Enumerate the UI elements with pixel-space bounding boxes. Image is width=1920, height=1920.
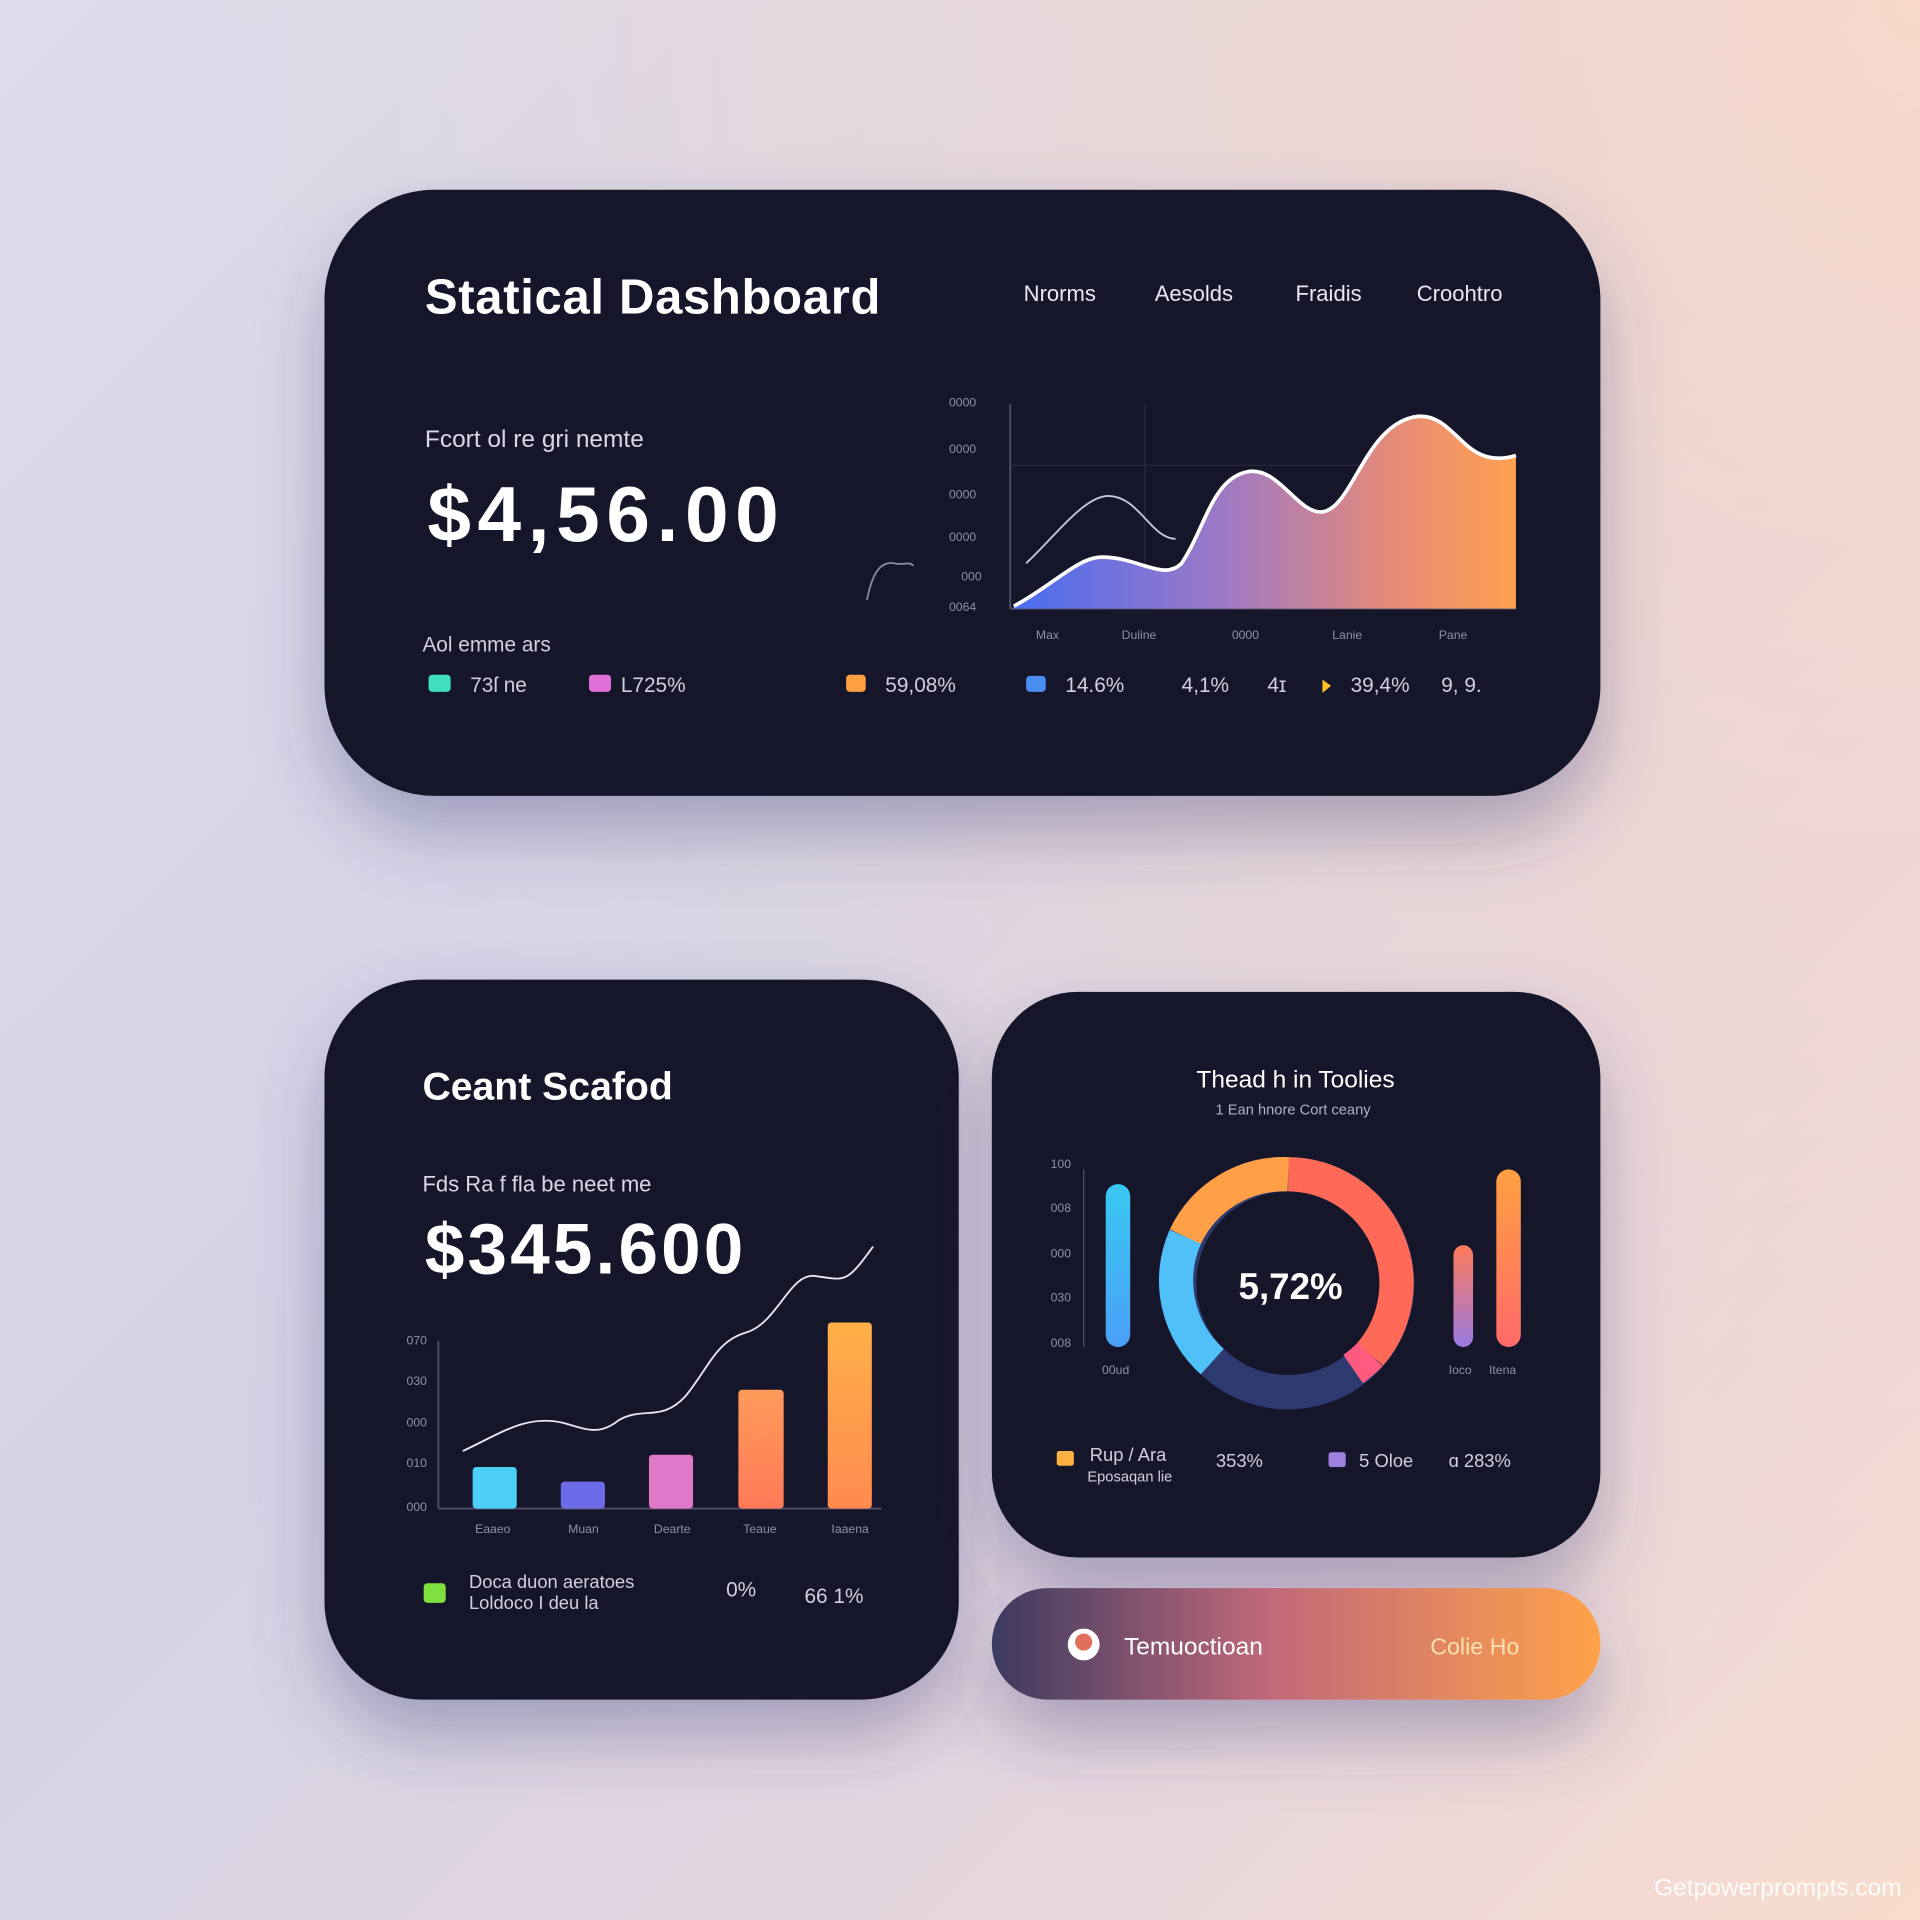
legend: 59,08% bbox=[885, 674, 956, 697]
chart: side bars: 100 bbox=[1051, 1157, 1071, 1171]
chart: side bars: 008 bbox=[1051, 1336, 1071, 1350]
subtitle: 1 Ean hnore Cort ceany bbox=[1215, 1102, 1371, 1118]
chart: side bars bbox=[1051, 1157, 1521, 1377]
legend: L725% bbox=[621, 674, 686, 697]
chart: area chart: 0064 bbox=[949, 600, 976, 614]
chart: area chart: 0000 bbox=[949, 396, 976, 410]
legend: 0% bbox=[726, 1579, 756, 1602]
legend: 73ſ ne bbox=[470, 674, 527, 697]
chart: side bars: 00ud bbox=[1102, 1363, 1129, 1377]
chart: area chart: 0000 bbox=[949, 442, 976, 456]
legend: 66 1% bbox=[804, 1585, 863, 1608]
chart: area chart: Max bbox=[1036, 628, 1059, 642]
chart: donut bbox=[1176, 1174, 1397, 1392]
text: action: Colie Ho bbox=[1430, 1633, 1519, 1659]
chart: bar chart: 000 bbox=[407, 1416, 427, 1430]
chart: area chart: 0000 bbox=[949, 487, 976, 501]
text: total label: Fcort ol re gri nemte bbox=[425, 426, 644, 453]
chart: area chart: Pane bbox=[1439, 628, 1468, 642]
chart: side bars: Ioco bbox=[1449, 1363, 1472, 1377]
button: gradient pill bbox=[992, 1588, 1600, 1700]
chart: area chart: 000 bbox=[961, 569, 982, 583]
legend: 5 Oloe bbox=[1359, 1450, 1413, 1471]
legend bbox=[422, 633, 1482, 697]
watermark: Getpowerprompts.com bbox=[1654, 1875, 1902, 1902]
text: label: Fds Ra f fla be neet me bbox=[422, 1171, 651, 1196]
legend: Rup / Ara bbox=[1090, 1444, 1167, 1465]
legend: Doca duon aeratoes bbox=[469, 1571, 634, 1592]
legend: Aol emme ars bbox=[422, 633, 551, 656]
legend: 4ɪ bbox=[1267, 674, 1286, 697]
legend: 353% bbox=[1216, 1450, 1263, 1471]
chart: bar chart: Dearte bbox=[654, 1522, 691, 1536]
chart: bar chart: Iaaena bbox=[831, 1522, 869, 1536]
chart: bar chart: 010 bbox=[407, 1456, 427, 1470]
chart: area chart: Duline bbox=[1122, 628, 1157, 642]
chart: side bars: 000 bbox=[1051, 1247, 1071, 1261]
chart: bar chart: 000 bbox=[407, 1500, 427, 1514]
navigation bbox=[1024, 281, 1502, 306]
chart: bar chart: 030 bbox=[407, 1374, 427, 1388]
icon: avatar bbox=[1068, 1629, 1100, 1660]
chart: bar chart: 070 bbox=[407, 1333, 427, 1347]
legend: 4,1% bbox=[1182, 674, 1229, 697]
text: total value: $4,56.00 bbox=[427, 470, 779, 558]
legend: 14.6% bbox=[1065, 674, 1124, 697]
chart: side bars: 008 bbox=[1051, 1201, 1071, 1215]
title: Thead h in Toolies bbox=[1196, 1066, 1395, 1093]
chart: donut: 5,72% bbox=[1239, 1266, 1343, 1307]
chart: area chart: 0000 bbox=[1232, 628, 1259, 642]
navigation: Nrorms bbox=[1024, 281, 1096, 306]
chart: area chart: Lanie bbox=[1332, 628, 1362, 642]
navigation: Croohtro bbox=[1417, 281, 1502, 306]
title: Ceant Scafod bbox=[422, 1066, 673, 1109]
chart: area chart: 0000 bbox=[949, 530, 976, 544]
panel: bottom-left revenue bbox=[324, 980, 959, 1700]
panel: top dashboard bbox=[324, 190, 1600, 796]
legend: ɑ 283% bbox=[1449, 1450, 1511, 1471]
chart: side bars: Itena bbox=[1489, 1363, 1516, 1377]
legend: 39,4% bbox=[1351, 674, 1410, 697]
chart: bar chart: Muan bbox=[568, 1522, 599, 1536]
chart: bar chart: Eaaeo bbox=[475, 1522, 511, 1536]
text: button label: Temuoctioan bbox=[1124, 1633, 1263, 1660]
legend bbox=[1057, 1444, 1511, 1486]
chart: bar chart: Teaue bbox=[743, 1522, 777, 1536]
chart: bar chart bbox=[407, 1247, 882, 1536]
panel: bottom-right donut bbox=[992, 992, 1600, 1558]
legend: 9, 9. bbox=[1441, 674, 1482, 697]
legend: Loldoco I deu la bbox=[469, 1592, 599, 1613]
chart: area chart bbox=[867, 396, 1516, 642]
text: value: $345.600 bbox=[425, 1210, 743, 1289]
navigation: Fraidis bbox=[1296, 281, 1362, 306]
chart: side bars: 030 bbox=[1051, 1291, 1071, 1305]
title: Statical Dashboard bbox=[425, 270, 880, 324]
legend: Eposaqan lie bbox=[1087, 1470, 1172, 1486]
navigation: Aesolds bbox=[1155, 281, 1233, 306]
legend bbox=[424, 1571, 863, 1613]
